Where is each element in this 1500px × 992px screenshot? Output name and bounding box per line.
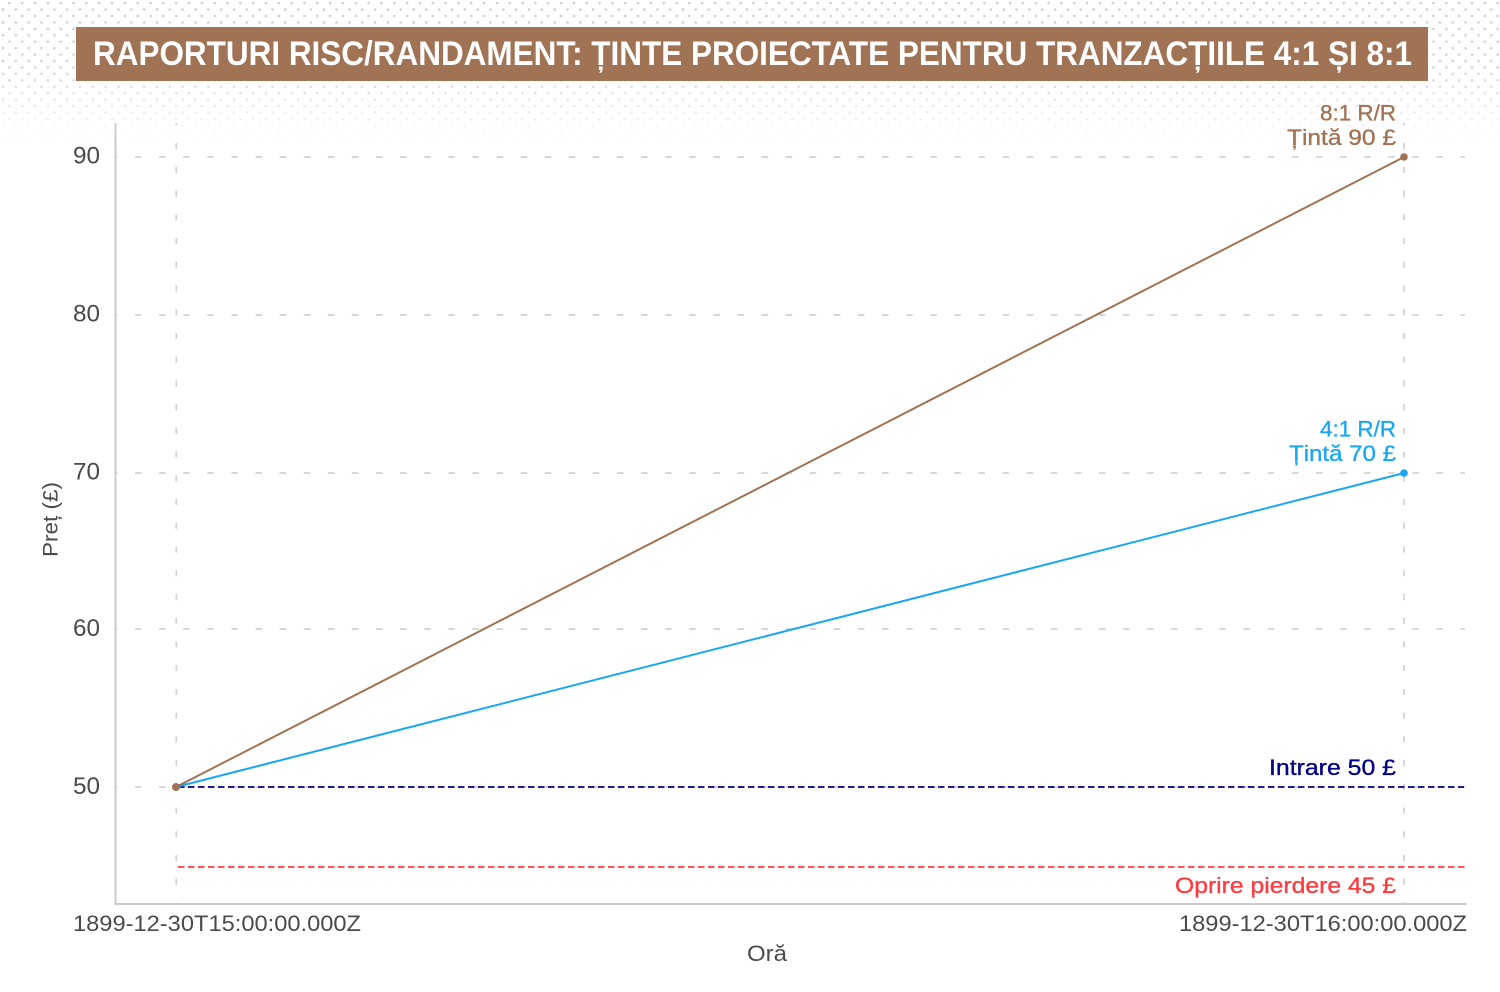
y axis tick labels: 60: [73, 615, 100, 642]
y axis tick labels: 50: [73, 773, 100, 800]
entry line at 50: [178, 786, 1464, 788]
x axis tick labels: 1899-12-30T16:00:00.000Z: [1179, 911, 1467, 936]
x axis title: Oră: [747, 941, 788, 966]
label: 4:1 target: Țintă 70 £: [1289, 441, 1397, 466]
label: 8:1 target: Țintă 90 £: [1287, 125, 1397, 150]
title banner: [76, 27, 1428, 81]
y axis tick labels: [73, 142, 100, 800]
y axis tick labels: 70: [73, 458, 100, 486]
label: 4:1 target: [1289, 416, 1397, 466]
label: stop loss: Oprire pierdere 45 £: [1175, 873, 1397, 898]
y axis title: Preț (£): [40, 482, 62, 557]
y axis tick labels: 90: [73, 142, 100, 170]
series: 4:1 target: [176, 469, 1408, 787]
x axis tick labels: [73, 911, 1467, 936]
series: 8:1 target: [172, 153, 1408, 791]
label: 8:1 target: 8:1 R/R: [1320, 100, 1396, 126]
label: 4:1 target: 4:1 R/R: [1320, 416, 1396, 442]
label: entry: Intrare 50 £: [1269, 755, 1397, 780]
title text: RAPORTURI RISC/RANDAMENT: ȚINTE PROIECTATE PENTRU TRANZACȚIILE 4:1 ȘI 8:1: [93, 35, 1412, 73]
x axis tick labels: 1899-12-30T15:00:00.000Z: [73, 911, 361, 936]
label: 8:1 target: [1287, 100, 1397, 150]
y axis tick labels: 80: [73, 300, 100, 328]
axes: [114, 123, 1467, 905]
stop loss line at 45: [178, 866, 1465, 868]
